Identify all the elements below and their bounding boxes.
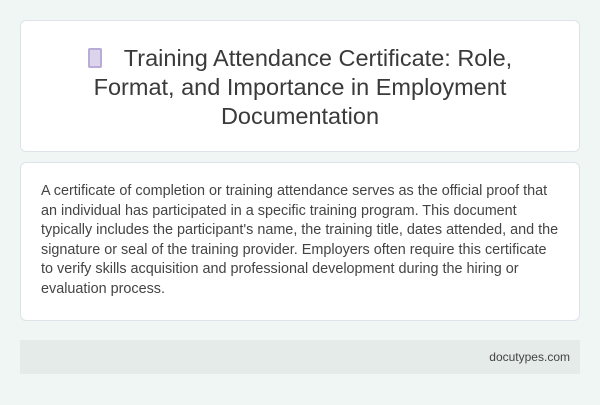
panel: header [20, 20, 580, 152]
panel: description [20, 162, 580, 321]
text block: A certificate of completion or training attendance serves as the official proof that an individual has participated in a specific training program. This document typically includes the participant's name, the training title, dates attended, and the signature or seal of the training provider. Employers often require this certificate to verify skills acquisition and professional development during the hiring or evaluation process. [41, 183, 558, 297]
icon: document [88, 48, 102, 68]
footer: docutypes.com [489, 350, 570, 364]
footer [20, 340, 580, 374]
title: Training Attendance Certificate: Role, Format, and Importance in Employment Documentation [94, 45, 512, 129]
